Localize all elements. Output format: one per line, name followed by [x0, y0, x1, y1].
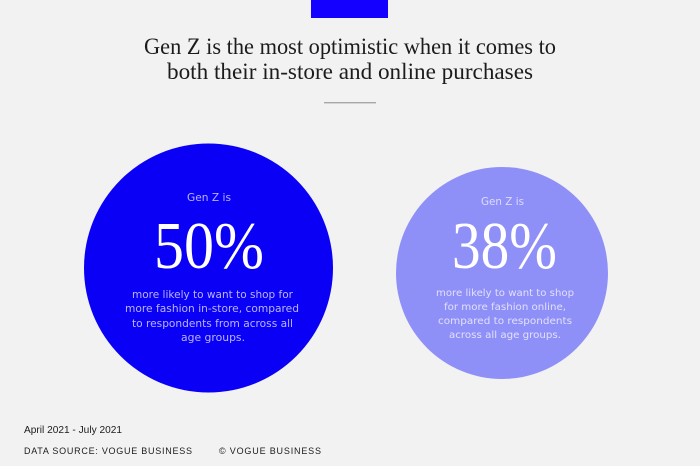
in-store stat: 50% — [154, 209, 264, 283]
online description: more likely to want to shop — [436, 288, 574, 299]
online description: across all age groups. — [449, 330, 561, 341]
online description: for more fashion online, — [444, 302, 566, 313]
online lead-in: Gen Z is — [481, 196, 524, 208]
title: Gen Z is the most optimistic when it comes to — [144, 34, 556, 60]
date range: April 2021 - July 2021 — [24, 425, 122, 436]
data source: DATA SOURCE: VOGUE BUSINESS — [24, 446, 192, 456]
in-store description: more likely to want to shop for — [132, 289, 294, 301]
in-store description: age groups. — [181, 332, 245, 344]
panel: in-store circle — [84, 144, 333, 392]
in-store description — [125, 289, 299, 344]
title divider — [324, 102, 376, 103]
online description: compared to respondents — [438, 316, 572, 327]
in-store description: more fashion in-store, compared — [125, 303, 299, 315]
panel: online circle — [396, 167, 608, 379]
online description — [436, 288, 574, 341]
in-store lead-in: Gen Z is — [187, 192, 231, 204]
title: both their in-store and online purchases — [167, 59, 533, 85]
copyright: © VOGUE BUSINESS — [219, 446, 321, 456]
top accent bar — [311, 0, 388, 18]
in-store description: to respondents from across all — [132, 318, 293, 330]
online stat: 38% — [452, 209, 557, 283]
title — [144, 34, 556, 85]
